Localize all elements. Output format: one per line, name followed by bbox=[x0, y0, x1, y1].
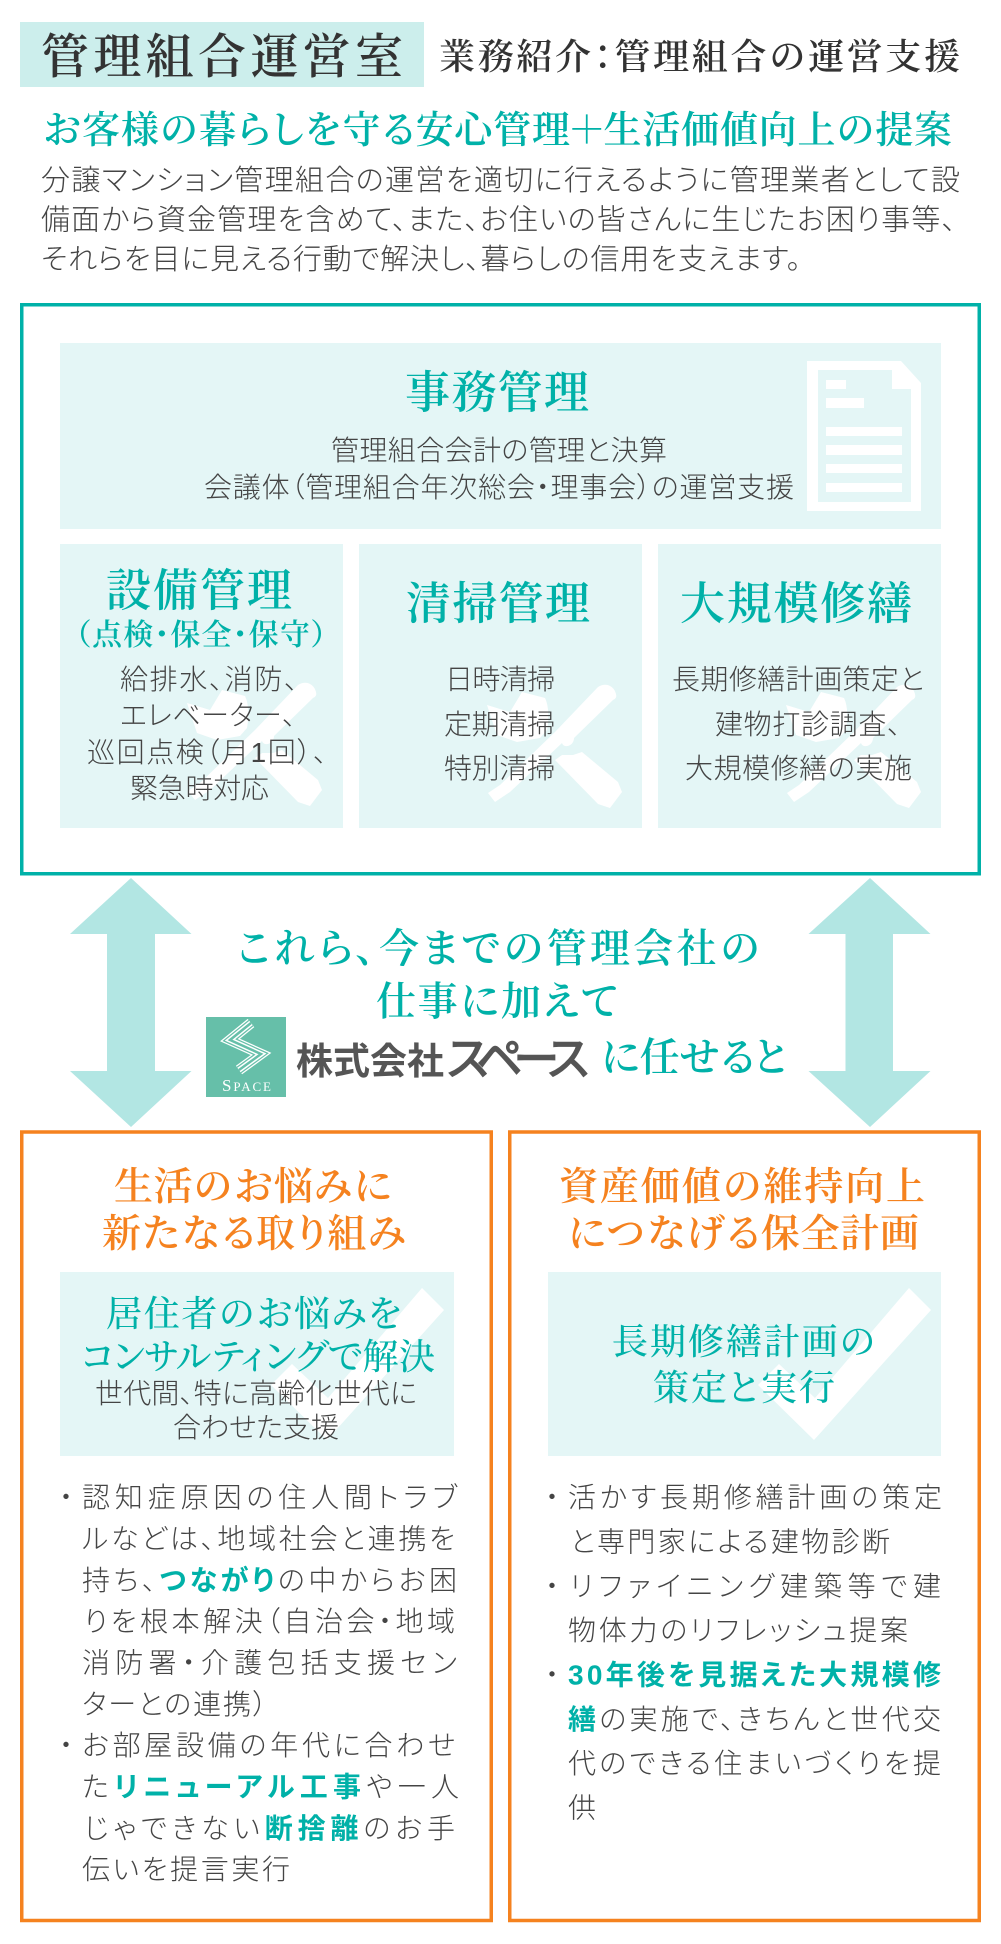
logotype: 株式会社スペース: 株式会社 bbox=[296, 1041, 444, 1082]
icon: check mark bbox=[271, 1288, 444, 1440]
icon: tools bbox=[187, 683, 322, 806]
header: title block: 管理組合運営室 bbox=[41, 31, 403, 84]
subheading: 点検・保全・保守: （点検・保全・保守） bbox=[76, 619, 326, 652]
text: 清掃管理 description: 特別清掃 bbox=[444, 753, 555, 784]
heading: 事務管理: 事務管理 bbox=[405, 368, 589, 418]
lead heading: お客様の暮らしを守る安心管理＋生活価値向上の提案 bbox=[42, 110, 952, 152]
bullet list: left: たリニューアル工事や一人 bbox=[82, 1772, 459, 1802]
text: 設備管理 description: 巡回点検（月1回）、 bbox=[87, 737, 327, 768]
subpanel: 居住者のお悩みをコンサルティングで解決 bbox=[60, 1272, 454, 1456]
intro text: 備面から資金管理を含めて、また、お住いの皆さんに生じたお困り事等、 bbox=[41, 204, 956, 236]
icon: tools bbox=[786, 685, 921, 808]
text: 設備管理 description: 緊急時対応 bbox=[130, 773, 269, 804]
subpanel: 長期修繕計画の策定と実行: 策定と実行 bbox=[653, 1368, 835, 1408]
subpanel: 長期修繕計画の策定と実行 bbox=[548, 1272, 941, 1456]
text: 設備管理 description: エレベーター、 bbox=[120, 700, 296, 731]
header: subtitle: 業務紹介：管理組合の運営支援 bbox=[439, 37, 960, 77]
bullet list: right: 繕の実施で、きちんと世代交 bbox=[568, 1704, 941, 1735]
bullet list: right: と専門家による建物診断 bbox=[570, 1526, 890, 1558]
bullet list: right: ・ bbox=[545, 1660, 559, 1690]
bullet list: left bbox=[59, 1482, 459, 1885]
callout text: 仕事に加えて bbox=[376, 979, 617, 1024]
icon: check mark bbox=[758, 1288, 931, 1440]
bullet list: right: 活かす長期修繕計画の策定 bbox=[568, 1482, 942, 1513]
subpanel: 居住者のお悩みをコンサルティングで解決: 世代間、特に高齢化世代に bbox=[95, 1378, 417, 1409]
heading: 生活のお悩みに新たなる取り組み: 生活のお悩みに bbox=[114, 1166, 392, 1209]
logotype: 株式会社スペース: スペース bbox=[447, 1033, 589, 1085]
subpanel: 居住者のお悩みをコンサルティングで解決: 合わせた支援 bbox=[173, 1412, 339, 1443]
panel: 大規模修繕 bbox=[658, 544, 941, 828]
text: 大規模修繕 description bbox=[672, 664, 924, 784]
subpanel: 長期修繕計画の策定と実行: 長期修繕計画の bbox=[612, 1322, 875, 1362]
bullet list: left: お部屋設備の年代に合わせ bbox=[82, 1730, 455, 1761]
bullet list: left: 消防署・介護包括支援セン bbox=[82, 1648, 457, 1678]
text: 清掃管理 description: 日時清掃 bbox=[445, 664, 555, 695]
bullet list: right: 代のできる住まいづくりを提 bbox=[568, 1748, 941, 1779]
panel: 事務管理 bbox=[60, 343, 941, 529]
heading: 資産価値の維持向上につなげる保全計画 bbox=[559, 1166, 925, 1256]
callout text bbox=[236, 926, 788, 1080]
panel: 資産価値の維持向上 bbox=[510, 1132, 979, 1920]
bullet list: left: ・ bbox=[59, 1482, 73, 1513]
panel: 清掃管理 bbox=[359, 544, 642, 828]
text: 大規模修繕 description: 大規模修繕の実施 bbox=[685, 753, 912, 784]
bullet list: left: りを根本解決（自治会・地域 bbox=[84, 1606, 455, 1637]
logo: SPACE bbox=[206, 1017, 286, 1097]
text: 事務管理 description bbox=[204, 435, 794, 503]
arrow: right double arrow bbox=[808, 878, 930, 1127]
subpanel: 居住者のお悩みをコンサルティングで解決: 居住者のお悩みを bbox=[106, 1294, 402, 1334]
heading: 生活のお悩みに新たなる取り組み: 新たなる取り組み bbox=[102, 1213, 406, 1256]
bullet list: left: 伝いを提言実行 bbox=[82, 1854, 290, 1885]
intro text bbox=[41, 164, 960, 276]
bullet list: right: ・ bbox=[545, 1482, 559, 1513]
intro text: それらを目に見える行動で解決し、暮らしの信用を支えます。 bbox=[41, 243, 801, 276]
bullet list: right: 供 bbox=[568, 1792, 596, 1824]
bullet list: left: ・ bbox=[59, 1730, 73, 1761]
text: 事務管理 description: 管理組合会計の管理と決算 bbox=[331, 435, 667, 466]
bullet list: right bbox=[545, 1482, 942, 1824]
bullet list: left: 持ち、つながりの中からお困 bbox=[82, 1564, 457, 1596]
heading: 清掃管理: 清掃管理 bbox=[406, 579, 590, 629]
panel: 生活のお悩み bbox=[22, 1132, 491, 1920]
text: 清掃管理 description: 定期清掃 bbox=[444, 709, 555, 740]
bullet list: left: 認知症原因の住人間トラブ bbox=[82, 1482, 458, 1513]
panel: services frame bbox=[22, 305, 979, 874]
icon: document bbox=[807, 361, 921, 511]
heading: 大規模修繕: 大規模修繕 bbox=[680, 579, 912, 629]
bullet list: left: ターとの連携） bbox=[82, 1689, 267, 1720]
text: 設備管理 description bbox=[87, 664, 327, 804]
text: 事務管理 description: 会議体（管理組合年次総会・理事会）の運営支援 bbox=[204, 472, 794, 503]
heading: 生活のお悩みに新たなる取り組み bbox=[102, 1166, 406, 1256]
text: 大規模修繕 description: 建物打診調査、 bbox=[715, 709, 901, 740]
bullet list: left: ルなどは、地域社会と連携を bbox=[82, 1524, 455, 1554]
arrow: left double arrow bbox=[70, 878, 192, 1127]
heading: 資産価値の維持向上につなげる保全計画: につなげる保全計画 bbox=[567, 1213, 919, 1256]
subpanel: 居住者のお悩みをコンサルティングで解決: コンサルティングで解決 bbox=[81, 1337, 435, 1377]
heading: 資産価値の維持向上につなげる保全計画: 資産価値の維持向上 bbox=[559, 1166, 925, 1209]
callout text: に任せると bbox=[600, 1035, 788, 1080]
icon: tools bbox=[487, 685, 622, 808]
bullet list: right: リファイニング建築等で建 bbox=[570, 1571, 941, 1602]
text: 清掃管理 description bbox=[444, 664, 555, 784]
callout text: これら、今までの管理会社の bbox=[236, 926, 760, 971]
bullet list: right: 30年後を見据えた大規模修 bbox=[568, 1660, 941, 1690]
text: 大規模修繕 description: 長期修繕計画策定と bbox=[672, 664, 924, 695]
heading: 設備管理: 設備管理 bbox=[106, 566, 292, 616]
bullet list: right: ・ bbox=[545, 1571, 559, 1602]
intro text: 分譲マンション管理組合の運営を適切に行えるように管理業者として設 bbox=[41, 164, 960, 197]
bullet list: left: じゃできない断捨離のお手 bbox=[84, 1813, 455, 1844]
text: 設備管理 description: 給排水、消防、 bbox=[120, 664, 298, 695]
logotype: 株式会社スペース bbox=[296, 1033, 589, 1085]
panel: 設備管理 bbox=[60, 544, 343, 828]
bullet list: right: 物体力のリフレッシュ提案 bbox=[568, 1615, 908, 1646]
logo: SPACE: SPACE bbox=[222, 1076, 271, 1095]
